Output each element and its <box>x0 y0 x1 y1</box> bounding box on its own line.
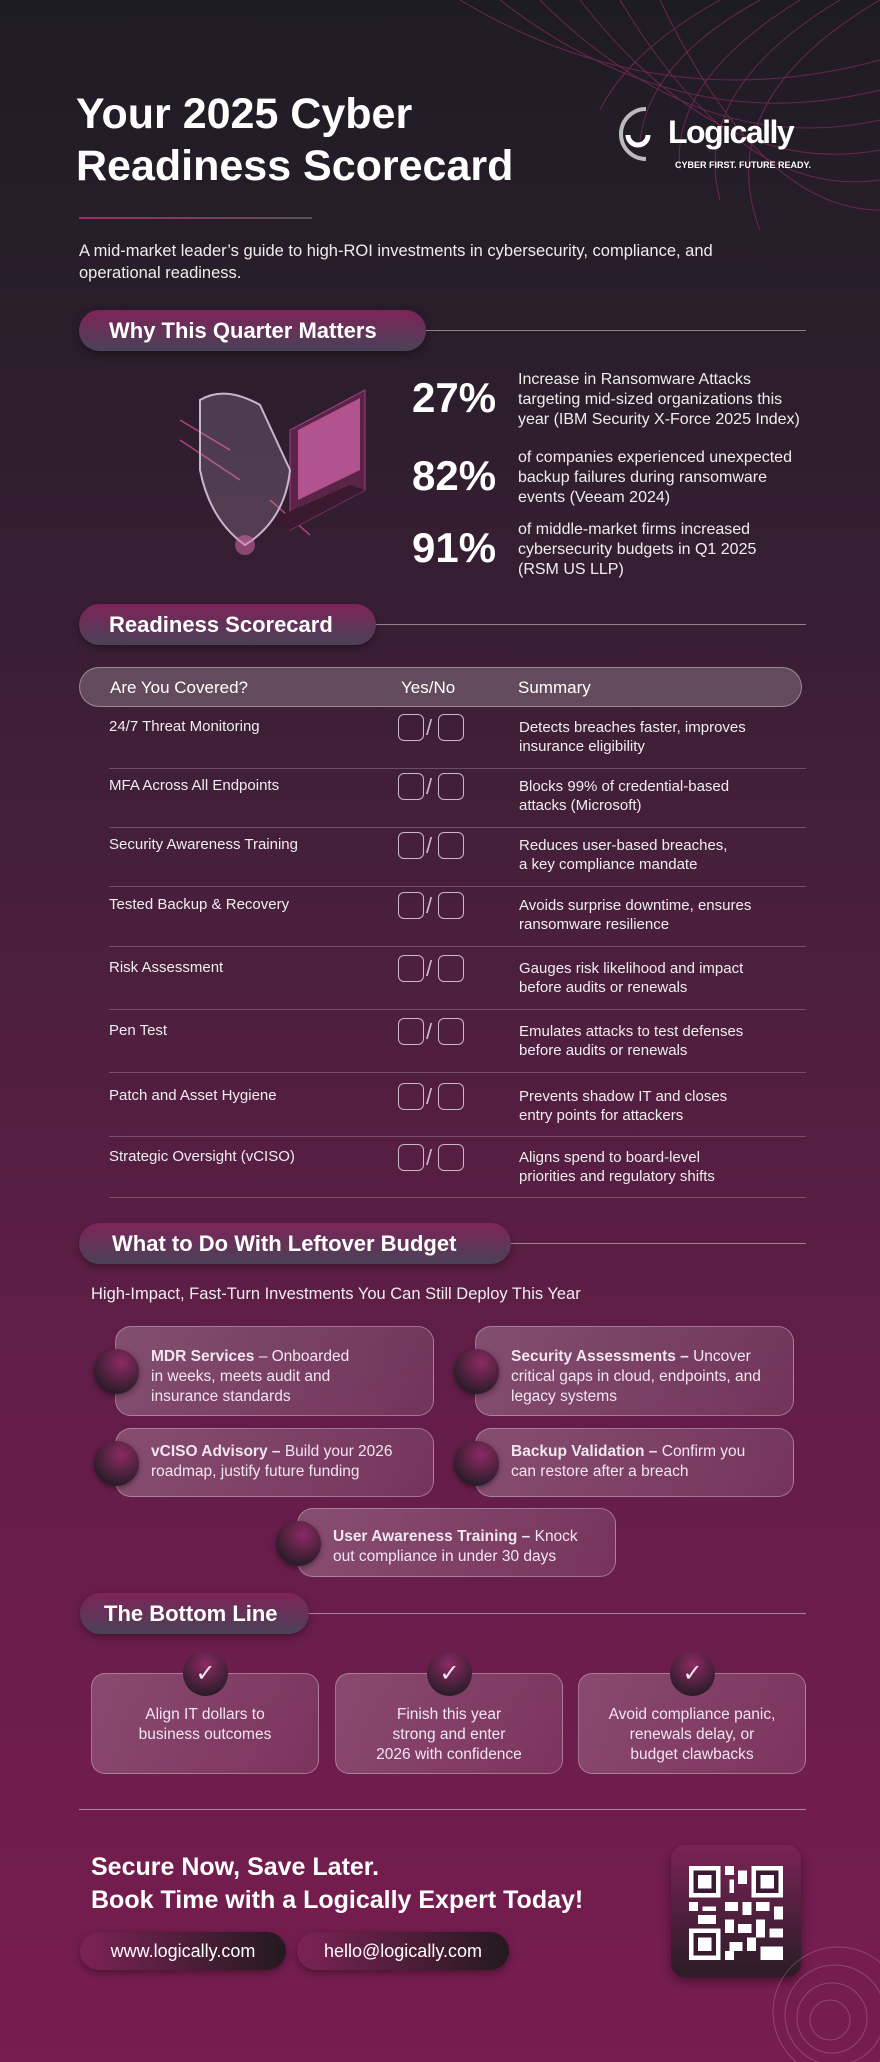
heading: The Bottom Line <box>80 1593 309 1634</box>
text: Emulates attacks to test defenses <box>519 1023 743 1040</box>
call to action: Book Time with a Logically Expert Today! <box>91 1886 583 1914</box>
stat 91%: of middle-market firms increased <box>518 521 750 538</box>
text: Strategic Oversight (vCISO) <box>109 1148 295 1165</box>
call to action: Secure Now, Save Later. <box>91 1853 379 1881</box>
text: Pen Test <box>109 1022 167 1039</box>
bottom card 2: strong and enter <box>393 1726 505 1743</box>
table header: Summary <box>518 678 591 697</box>
bottom card 1: business outcomes <box>139 1726 271 1743</box>
text: Reduces user-based breaches, <box>519 837 727 854</box>
decorative spiral bottom right <box>772 1946 880 2062</box>
text: Detects breaches faster, improves <box>519 719 746 736</box>
text: attacks (Microsoft) <box>519 797 642 814</box>
QR code <box>671 1845 801 1977</box>
text: priorities and regulatory shifts <box>519 1168 715 1185</box>
logo: CYBER FIRST. FUTURE READY. <box>675 160 811 170</box>
bottom card 2 <box>335 1673 563 1774</box>
text: Avoids surprise downtime, ensures <box>519 897 751 914</box>
call to action <box>91 1853 583 1914</box>
stat 27% <box>412 371 800 428</box>
card: MDR Services: MDR Services – Onboarded in weeks, meets audit and insurance standards <box>151 1348 349 1405</box>
link: email: hello@logically.com <box>324 1941 482 1961</box>
bottom card 1: ✓ <box>195 1660 216 1687</box>
stat 82%: backup failures during ransomware <box>518 469 767 486</box>
logo <box>619 107 811 170</box>
text: 24/7 Threat Monitoring <box>109 718 260 735</box>
budget subtitle: High-Impact, Fast-Turn Investments You Can Still Deploy This Year <box>91 1285 581 1303</box>
stat 82%: 82% <box>412 452 496 499</box>
card: Security Assessments <box>475 1326 794 1416</box>
text: / <box>426 893 432 918</box>
text: Prevents shadow IT and closes <box>519 1088 727 1105</box>
stat 82%: events (Veeam 2024) <box>518 489 670 506</box>
link: email <box>297 1932 509 1970</box>
card: Backup Validation: Backup Validation – Confirm you can restore after a breach <box>511 1443 745 1480</box>
table header: Yes/No <box>401 678 455 697</box>
text: Aligns spend to board-level <box>519 1149 700 1166</box>
card: Security Assessments: Security Assessments – Uncover critical gaps in cloud, endpoints, and legacy systems <box>511 1348 761 1405</box>
card: vCISO Advisory <box>115 1428 434 1497</box>
text: entry points for attackers <box>519 1107 683 1124</box>
text: Gauges risk likelihood and impact <box>519 960 743 977</box>
stat 27%: year (IBM Security X-Force 2025 Index) <box>518 411 800 428</box>
text: / <box>426 1019 432 1044</box>
title: Readiness Scorecard <box>76 142 513 190</box>
text: Risk Assessment <box>109 959 223 976</box>
bottom card 1 <box>91 1673 319 1774</box>
stat 91% <box>412 521 756 578</box>
bottom card 3: budget clawbacks <box>630 1746 754 1763</box>
link: website: www.logically.com <box>111 1941 255 1961</box>
link: website <box>80 1932 286 1970</box>
scorecard table <box>79 667 802 707</box>
text: / <box>426 956 432 981</box>
heading: Readiness Scorecard <box>79 604 376 645</box>
card: User Awareness Training: User Awareness Training – Knock out compliance in under 30 days <box>333 1528 578 1565</box>
stat 91%: cybersecurity budgets in Q1 2025 <box>518 541 756 558</box>
card: vCISO Advisory: vCISO Advisory – Build your 2026 roadmap, justify future funding <box>151 1443 393 1480</box>
subtitle: A mid-market leader’s guide to high-ROI investments in cybersecurity, compliance, and operational readiness. <box>79 242 713 282</box>
decorative mesh top right <box>460 0 880 230</box>
text: Tested Backup & Recovery <box>109 896 289 913</box>
card: User Awareness Training <box>297 1508 616 1577</box>
text: Patch and Asset Hygiene <box>109 1087 277 1104</box>
bottom card 3: ✓ <box>682 1660 703 1687</box>
bottom card 2: 2026 with confidence <box>376 1746 522 1763</box>
text: a key compliance mandate <box>519 856 697 873</box>
bottom card 3: Avoid compliance panic, <box>609 1706 775 1723</box>
card: MDR Services <box>115 1326 434 1416</box>
title <box>76 90 513 190</box>
text: / <box>426 715 432 740</box>
stat 82%: of companies experienced unexpected <box>518 449 792 466</box>
heading: What to Do With Leftover Budget <box>79 1223 511 1264</box>
bottom card 3 <box>578 1673 806 1774</box>
table header <box>79 667 802 707</box>
heading: Why This Quarter Matters: Why This Quarter Matters <box>109 318 377 343</box>
stat 91%: (RSM US LLP) <box>518 561 624 578</box>
text: insurance eligibility <box>519 738 645 755</box>
table header: Are You Covered? <box>110 678 248 697</box>
text: before audits or renewals <box>519 979 687 996</box>
logo: Logically <box>668 114 793 150</box>
illustration: shield and laptop <box>180 389 366 555</box>
bottom card 3: renewals delay, or <box>630 1726 754 1743</box>
divider under title <box>79 217 312 219</box>
text: / <box>426 774 432 799</box>
bottom card 2: ✓ <box>439 1660 460 1687</box>
stat 91%: 91% <box>412 524 496 571</box>
text: Security Awareness Training <box>109 836 298 853</box>
title: Your 2025 Cyber <box>76 90 412 138</box>
text: before audits or renewals <box>519 1042 687 1059</box>
heading: The Bottom Line: The Bottom Line <box>104 1601 278 1626</box>
text: Blocks 99% of credential-based <box>519 778 729 795</box>
stat 82% <box>412 449 792 506</box>
stats <box>412 371 800 578</box>
text: / <box>426 1145 432 1170</box>
heading: Why This Quarter Matters <box>79 310 426 351</box>
stat 27%: targeting mid-sized organizations this <box>518 391 782 408</box>
bottom card 1: Align IT dollars to <box>145 1706 265 1723</box>
bottom card 2: Finish this year <box>397 1706 501 1723</box>
stat 27%: 27% <box>412 374 496 421</box>
text: ransomware resilience <box>519 916 669 933</box>
text: / <box>426 833 432 858</box>
stat 27%: Increase in Ransomware Attacks <box>518 371 751 388</box>
text: / <box>426 1084 432 1109</box>
card: Backup Validation <box>475 1428 794 1497</box>
heading: What to Do With Leftover Budget: What to Do With Leftover Budget <box>112 1231 456 1256</box>
text: MFA Across All Endpoints <box>109 777 279 794</box>
heading: Readiness Scorecard: Readiness Scorecard <box>109 612 333 637</box>
